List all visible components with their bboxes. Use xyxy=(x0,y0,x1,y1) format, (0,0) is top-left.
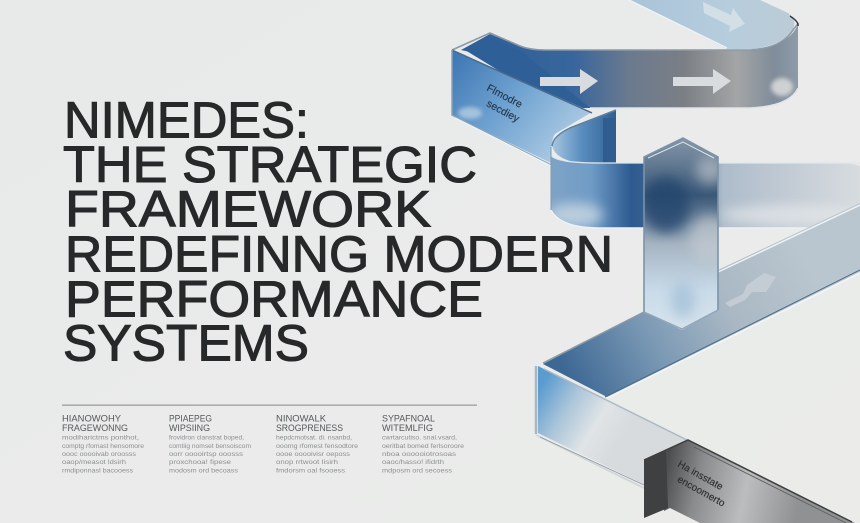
title: PERFORMANCE xyxy=(65,270,483,328)
column 4: Syfafnoal Witemlfig xyxy=(382,414,464,474)
title: REDEFINNG MODERN xyxy=(65,226,613,282)
column 2: Ppiaepeg Wipsiing xyxy=(169,414,251,474)
title: THE STRATEGIC xyxy=(63,136,477,193)
column 2: Ppiaepeg Wipsiing: oorr ooooirtsp ooosss xyxy=(169,451,244,458)
column 4: Syfafnoal Witemlfig: SYPAFNOAL xyxy=(382,414,435,424)
icon: arrow 1 xyxy=(540,69,598,94)
icon: faded arrow on diagonal band xyxy=(725,273,776,307)
column 4: Syfafnoal Witemlfig: oeritbat bomed ferlsoroore xyxy=(382,443,464,450)
column 1: Hianowohy Fragewonng: oooc ooooivab oroosss xyxy=(62,451,137,458)
column 2: Ppiaepeg Wipsiing: WIPSIING xyxy=(169,423,210,434)
column 2: Ppiaepeg Wipsiing: PPIAEPEG xyxy=(169,414,212,424)
column 2: Ppiaepeg Wipsiing: modosm ord becoass xyxy=(169,468,239,474)
ribbon: front panel xyxy=(536,366,687,488)
ribbon: third diagonal band xyxy=(543,203,860,398)
label: Ha insstate encoomerto: encoomerto xyxy=(675,474,727,510)
column 3: Ninowalk Srogpreness: SROGPRENESS xyxy=(276,423,343,434)
column 2: Ppiaepeg Wipsiing: proxchooa! fipese xyxy=(169,459,231,466)
column 2: Ppiaepeg Wipsiing: frovidron clanstrat boped, xyxy=(169,434,244,442)
column 1: Hianowohy Fragewonng xyxy=(62,414,144,474)
ribbon: top returning segment xyxy=(629,0,794,49)
title: NIMEDES: xyxy=(64,92,309,148)
title: FRAMEWORK xyxy=(65,180,431,238)
column 1: Hianowohy Fragewonng: rmdiponnasl bacooess xyxy=(62,468,134,474)
column 2: Ppiaepeg Wipsiing: comtiig nomset bensoiscom xyxy=(169,443,251,450)
icon: arrow 2 xyxy=(673,69,731,94)
label: Flmodre secdiey xyxy=(478,82,529,125)
column 3: Ninowalk Srogpreness: oooe ooooivisr oeposs xyxy=(276,451,351,458)
ribbon: vertical translucent column xyxy=(643,137,719,330)
column 4: Syfafnoal Witemlfig: cwrtarcutiso. snal.vsard, xyxy=(382,434,457,442)
ribbon: main horizontal band with arrows xyxy=(452,16,798,108)
column 3: Ninowalk Srogpreness: fmdorsm oal fsooess xyxy=(276,468,346,474)
column 4: Syfafnoal Witemlfig: WITEMLFIG xyxy=(382,423,433,434)
column 3: Ninowalk Srogpreness xyxy=(276,414,358,474)
label: Flmodre secdiey: secdiey xyxy=(484,98,522,125)
icon: faded arrow on top segment xyxy=(703,2,745,32)
column 4: Syfafnoal Witemlfig: oaoc/hasso! ifidrth xyxy=(382,459,444,466)
column 3: Ninowalk Srogpreness: NINOWALK xyxy=(276,414,327,424)
ribbon: dark steel end with label xyxy=(644,440,855,523)
column 3: Ninowalk Srogpreness: onop rrtwoot Iisirh xyxy=(276,459,338,466)
column 3: Ninowalk Srogpreness: ooomg rfomest fensodtore xyxy=(276,443,358,450)
column 1: Hianowohy Fragewonng: HIANOWOHY xyxy=(62,414,122,424)
title: SYSTEMS xyxy=(63,314,309,372)
ribbon: second band fading right xyxy=(547,147,860,228)
column 3: Ninowalk Srogpreness: hepdcmotsat. di. nsanbd, xyxy=(276,434,352,442)
ribbon: inner curve behind second band xyxy=(552,110,616,163)
label: Ha insstate encoomerto xyxy=(669,459,734,510)
label: Flmodre secdiey: Flmodre xyxy=(485,82,524,111)
ribbon: left end panel with label xyxy=(452,50,592,166)
column 1: Hianowohy Fragewonng: FRAGEWONNG xyxy=(62,423,128,434)
column 1: Hianowohy Fragewonng: oaop/measot ldsirh xyxy=(62,459,126,466)
column 4: Syfafnoal Witemlfig: mdposm ord secoess xyxy=(382,468,453,474)
column 4: Syfafnoal Witemlfig: nboa oooooiotrosoas xyxy=(382,451,457,458)
label: Ha insstate encoomerto: Ha insstate xyxy=(676,459,725,493)
column 1: Hianowohy Fragewonng: modiharictms ponthot, xyxy=(62,434,139,442)
divider rule xyxy=(62,404,477,406)
column 1: Hianowohy Fragewonng: comptg rfomast hensomore xyxy=(62,443,144,450)
title xyxy=(63,92,613,372)
